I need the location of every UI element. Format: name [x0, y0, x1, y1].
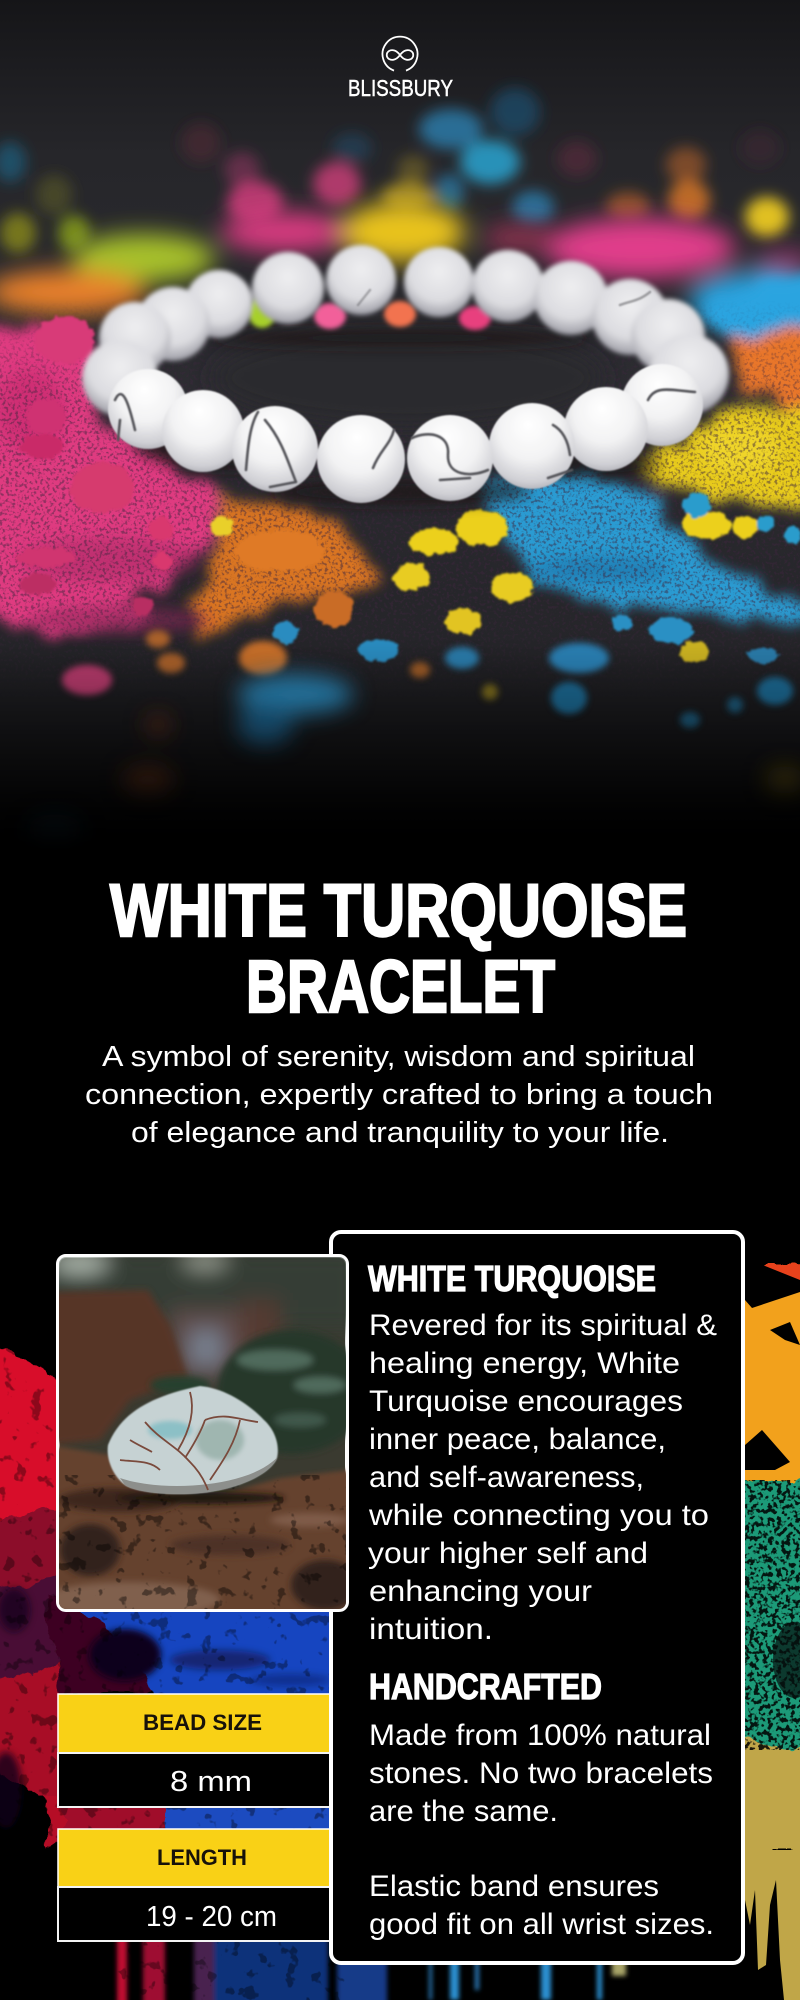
title: BRACELET — [246, 945, 555, 1028]
subtitle: A symbol of serenity, wisdom and spiritual — [102, 1041, 695, 1073]
stone shading — [148, 1421, 192, 1439]
spec table: length: LENGTH — [157, 1845, 247, 1870]
mustard drips — [745, 1850, 800, 2000]
title: WHITE TURQUOISE — [110, 869, 687, 952]
stone veins — [120, 1392, 258, 1490]
drips below the tables — [113, 1942, 630, 2000]
spec table: bead size: BEAD SIZE — [143, 1710, 262, 1735]
subtitle: connection, expertly crafted to bring a touch — [85, 1079, 713, 1111]
text block: handcrafted description: Elastic band ensures — [369, 1870, 659, 1903]
text block: white turquoise description: intuition. — [369, 1613, 493, 1646]
spec table: bead size: 8 mm — [170, 1766, 252, 1798]
text block: white turquoise description: Revered for its spiritual & — [369, 1309, 717, 1342]
paint splash: right — [745, 1262, 800, 2000]
stone — [108, 1386, 278, 1494]
title — [110, 869, 687, 1028]
spec table: length — [58, 1829, 343, 1941]
bottom fade to black — [0, 640, 800, 860]
subtitle: of elegance and tranquility to your life. — [131, 1117, 669, 1149]
ground — [50, 1445, 350, 1620]
icon: infinity ring — [382, 37, 418, 71]
panel: description — [331, 1232, 743, 1963]
text block: white turquoise description: your higher self and — [368, 1537, 648, 1570]
green paint texture — [745, 1480, 800, 1750]
hero photo: white turquoise bracelet on coloured powder — [0, 0, 800, 860]
back beads — [82, 245, 729, 416]
soil texture — [59, 1475, 346, 1609]
text block: handcrafted description: stones. No two bracelets — [369, 1757, 713, 1790]
text block: white turquoise description: healing energy, White — [369, 1347, 680, 1380]
soft foreground specks — [62, 630, 793, 728]
heading: white turquoise: WHITE TURQUOISE — [368, 1258, 656, 1299]
inner table inside the bracelet — [226, 359, 596, 422]
text block: white turquoise description: Turquoise encourages — [369, 1385, 683, 1418]
spec table: bead size — [58, 1694, 343, 1807]
shrub — [150, 1330, 367, 1454]
bracelet beads — [82, 245, 729, 503]
text block: white turquoise description: inner peace, balance, — [369, 1423, 666, 1456]
powder heaps in the foreground — [0, 270, 800, 640]
mottled darker powder — [0, 370, 780, 634]
bead veins — [115, 290, 695, 487]
dark soil patches — [40, 1488, 359, 1618]
orange paint cracks — [745, 1264, 800, 1470]
logo wordmark: BLISSBURY — [348, 75, 453, 101]
grain on the powder — [0, 310, 800, 644]
text block: handcrafted description: Made from 100% natural — [369, 1719, 711, 1752]
rock in the background — [50, 1290, 188, 1445]
text block: white turquoise description: enhancing your — [369, 1575, 592, 1608]
front beads — [108, 364, 703, 503]
text block: handcrafted description: good fit on all wrist sizes. — [369, 1908, 714, 1941]
dark shadow under the bracelet — [140, 329, 660, 505]
text block: white turquoise description — [368, 1309, 717, 1646]
dark patches in the paint — [0, 1588, 330, 1828]
heading: handcrafted: HANDCRAFTED — [369, 1666, 602, 1707]
powder clumps — [16, 316, 800, 663]
powder band behind the bracelet — [0, 202, 800, 328]
text block: handcrafted description — [369, 1719, 714, 1941]
text block: white turquoise description: and self-awareness, — [369, 1461, 644, 1494]
text block: white turquoise description: while connecting you to — [368, 1499, 709, 1532]
text block: handcrafted description: are the same. — [369, 1795, 558, 1828]
reflections beneath the back beads — [248, 296, 491, 330]
subtitle — [85, 1041, 713, 1149]
spec table: length: 19 - 20 cm — [146, 1901, 277, 1933]
paint splash: left and bottom — [0, 1340, 626, 2000]
blurred backdrop — [40, 1250, 360, 1380]
logo: Blissbury — [348, 37, 453, 101]
out of focus powder in the background — [0, 88, 789, 253]
photo: white turquoise stone on rock — [56, 1254, 349, 1612]
